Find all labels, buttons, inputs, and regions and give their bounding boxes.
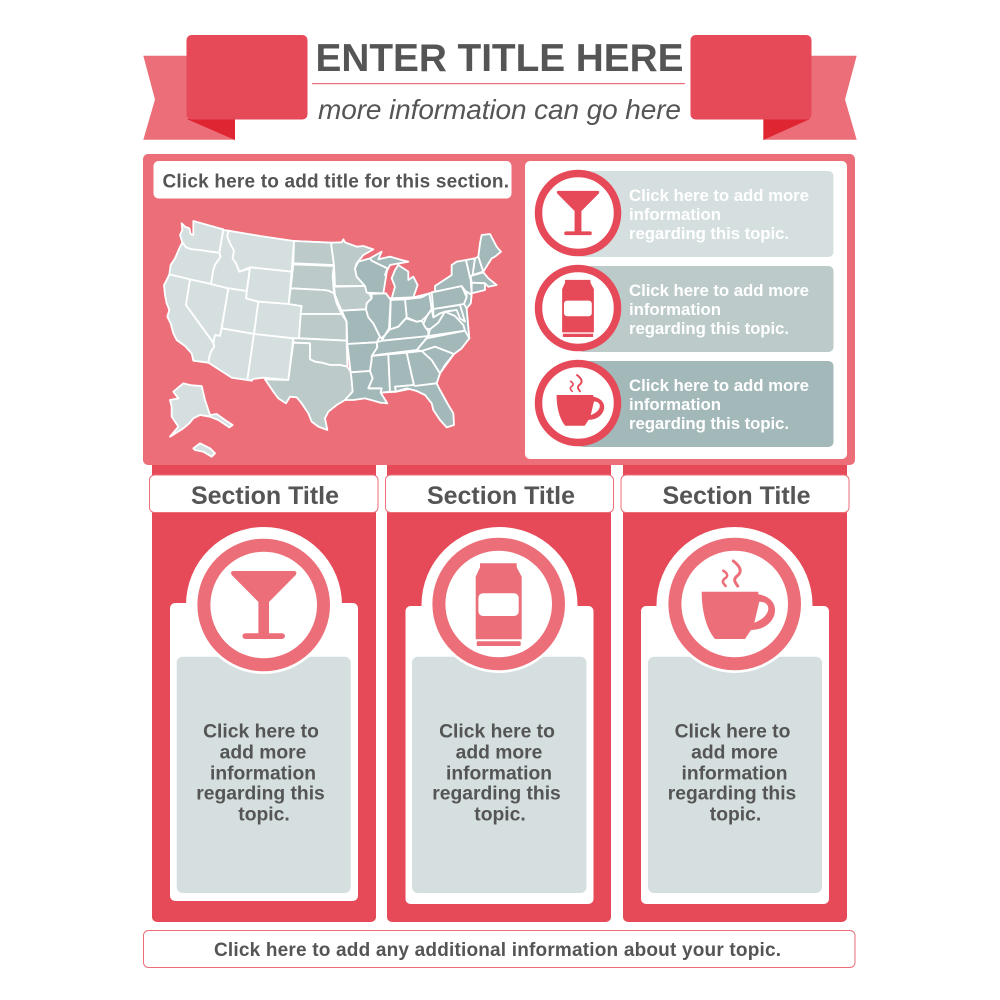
card text 1 [196,722,325,826]
topic row: cup: information [629,395,721,414]
card text 1: information [210,764,316,784]
card text 1: topic. [238,804,290,826]
topic row: glass [538,171,834,257]
card text 3: topic. [710,804,761,826]
card text 2: topic. [474,804,526,826]
icon: can [476,563,522,646]
topic row: glass: regarding this topic. [629,224,789,243]
panel: column 1 [150,465,378,922]
card text 2: add more [456,742,543,764]
title: ENTER TITLE HERE [316,37,684,80]
panel: column 2 [386,465,614,922]
section title 1 [150,475,378,512]
topic row: can [538,266,834,352]
ribbon banner left [143,35,308,140]
card text 2: information [446,764,552,784]
footer note: Click here to add any additional information about your topic. [214,940,781,961]
card 1 [170,527,358,901]
section title box: Click here to add title for this section. [162,172,509,192]
panel: column 3 [621,465,849,922]
card text 3: information [681,764,788,784]
section title 2 [386,475,614,512]
footer note [144,930,855,968]
topic row: can: information [629,300,721,319]
title divider [312,83,685,84]
card text 3 [668,722,796,826]
card text 2: Click here to [439,722,555,742]
subtitle: more information can go here [318,94,681,125]
topic row: cup: regarding this topic. [629,414,789,433]
section title 2: Section Title [427,482,575,510]
card text 3: add more [691,742,778,764]
card text 3: regarding this [668,784,796,804]
section title box [154,161,512,198]
section title 1: Section Title [191,482,339,510]
card text 1: Click here to [203,722,319,742]
card text 2 [432,722,561,826]
topic row: cup [538,361,834,447]
card text 1: add more [220,742,307,764]
topic row: glass: Click here to add more [629,186,809,205]
topics box [525,161,847,459]
icon: cocktail glass [231,571,296,639]
card text 2: regarding this [432,784,561,804]
section title 3 [621,475,849,512]
ribbon banner right [690,35,857,140]
panel: map and topics [143,154,855,465]
card 3 [641,527,829,904]
card text 1: regarding this [196,784,325,804]
topic row: can: regarding this topic. [629,319,789,338]
section title 3: Section Title [662,482,811,510]
card text 3: Click here to [675,722,791,742]
topic row: glass: information [629,205,721,224]
topic row: can: Click here to add more [629,281,809,300]
topic row: cup: Click here to add more [629,376,809,395]
card 2 [406,527,594,904]
icon: coffee cup [702,561,775,639]
map of the United States [164,221,501,457]
